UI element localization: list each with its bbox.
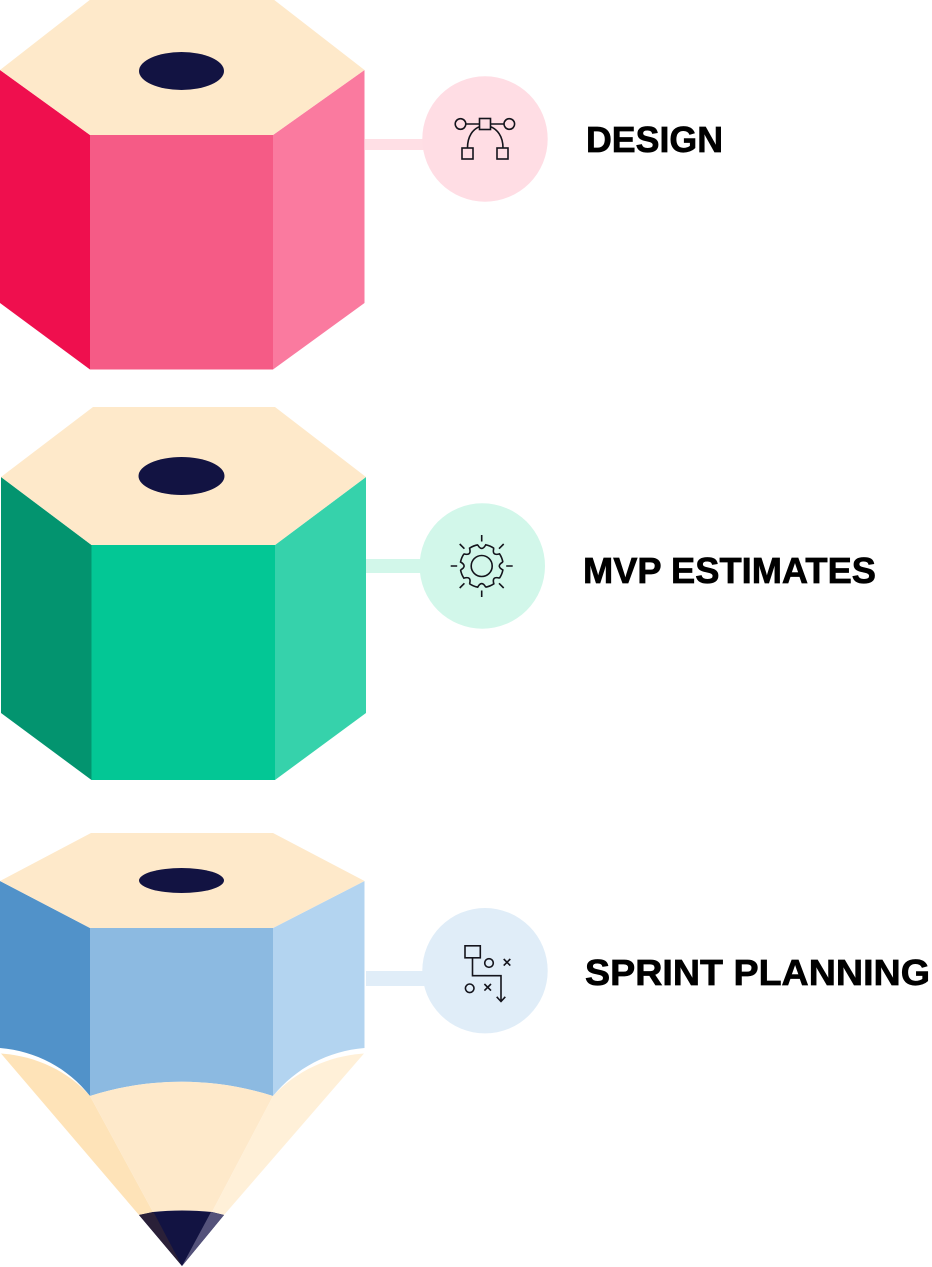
mvp segment right face [275, 477, 366, 780]
icon: bezier curve tool [455, 118, 515, 159]
mvp segment top [1, 407, 366, 545]
sprint segment hole [139, 868, 224, 893]
mvp segment front face [92, 545, 275, 780]
mvp segment hole [138, 457, 224, 495]
icon badge: mvp estimates [420, 503, 545, 629]
pencil lead left shade [139, 1212, 182, 1266]
connector: design [365, 139, 425, 150]
badge circle [420, 503, 545, 629]
sprint segment right face [273, 881, 364, 1096]
label: mvp estimates: MVP ESTIMATES [583, 550, 876, 591]
mvp segment left face [1, 477, 92, 780]
icon: play diagram [465, 946, 510, 1002]
pencil tip wood centre [90, 1082, 273, 1212]
label: sprint planning: SPRINT PLANNING [585, 952, 930, 993]
pencil tip wood right [212, 1054, 364, 1215]
pencil segment: mvp estimates [1, 407, 366, 780]
sprint segment front face [90, 928, 273, 1096]
pencil lead right shade [182, 1212, 224, 1266]
pencil tip wood left [1, 1054, 153, 1215]
design segment right face [273, 70, 364, 370]
badge circle [422, 76, 548, 202]
pencil lead [139, 1210, 224, 1266]
pencil segment: design [0, 0, 364, 370]
pencil segment: sprint planning with tip [0, 833, 364, 1266]
connector: mvp estimates [366, 559, 422, 573]
connector: sprint planning [366, 971, 425, 986]
sprint segment left face [0, 881, 90, 1096]
design segment left face [0, 70, 90, 370]
design segment hole [139, 52, 224, 90]
sprint segment top [0, 833, 364, 928]
icon: gear [451, 535, 513, 597]
design segment top [0, 0, 364, 135]
icon badge: design [422, 76, 548, 202]
badge circle [422, 908, 548, 1033]
design segment front face [90, 135, 273, 370]
icon badge: sprint planning [422, 908, 548, 1033]
label: design: DESIGN [586, 119, 723, 160]
